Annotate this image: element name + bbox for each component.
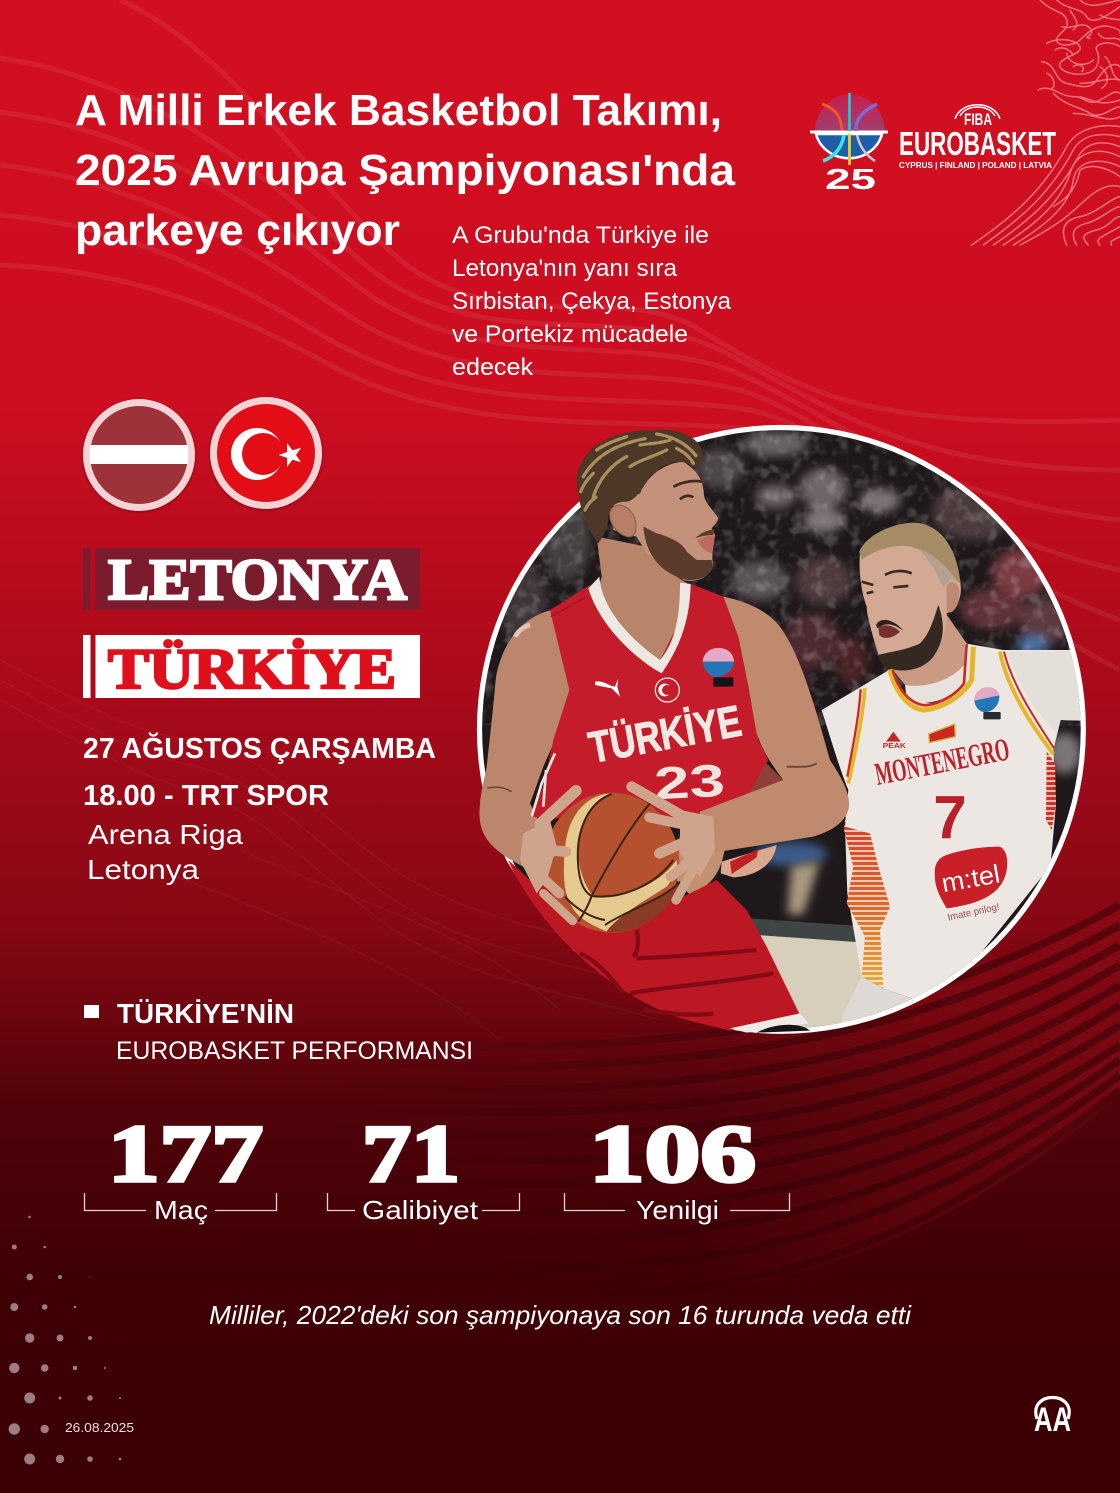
player: Türkiye number 23	[479, 430, 849, 1033]
far forearm	[721, 845, 777, 877]
sponsor tagline: Imate prilog!	[947, 902, 1000, 924]
brow and eye	[673, 481, 702, 499]
stat: matches played: 177	[108, 1108, 263, 1199]
side fade	[920, 550, 958, 586]
match details: 27 AĞUSTOS ÇARŞAMBA	[83, 731, 436, 765]
stat: wins: 71	[362, 1108, 460, 1199]
head	[860, 546, 961, 670]
photo: two basketball players in circular frame	[470, 420, 1100, 1050]
collar and trim	[890, 647, 973, 710]
shoulder seam	[551, 597, 587, 617]
EuroBasket jersey badge	[974, 687, 1001, 719]
shorts folds	[580, 930, 773, 1015]
title: 2025 Avrupa Şampiyonası'nda	[75, 146, 736, 195]
intro text block: A Grubu'nda Türkiye ile	[452, 222, 709, 249]
stat: matches played: Maç	[154, 1195, 208, 1225]
white jersey	[822, 643, 1084, 1000]
match details: Letonya	[87, 854, 199, 885]
beard	[643, 527, 713, 580]
elbow crease	[487, 787, 512, 792]
front arm	[697, 597, 849, 853]
intro text block: Letonya'nın yanı sıra	[452, 255, 678, 282]
arm muscle crease	[787, 763, 817, 767]
red jersey	[530, 583, 768, 820]
icon: Turkey flag	[210, 397, 322, 509]
section heading	[116, 998, 473, 1065]
far forearm wristband	[730, 849, 758, 874]
banner: Letonya: LETONYA	[108, 547, 407, 612]
EuroBasket jersey badge	[703, 648, 734, 687]
back arm	[479, 610, 573, 868]
belly skin	[677, 833, 725, 895]
stat: wins	[328, 1108, 520, 1225]
jersey text MONTENEGRO: MONTENEGRO	[872, 731, 1012, 792]
icon: EuroBasket globe trophy	[810, 93, 888, 196]
PEAK logo: PEAK	[883, 741, 907, 750]
stat: losses: Yenilgi	[636, 1195, 719, 1225]
left hand	[520, 791, 576, 921]
match details: 18.00 - TRT SPOR	[83, 780, 329, 812]
shoulder highlight	[515, 625, 530, 637]
hair	[859, 523, 961, 583]
icon: Anadolu Agency logo: AA	[1034, 1401, 1071, 1439]
mustache	[876, 620, 903, 631]
neck and chest	[597, 537, 687, 661]
jersey number 23: 23	[653, 755, 726, 809]
jersey side trim	[532, 753, 555, 817]
puma logo	[595, 678, 620, 697]
shoe	[757, 1025, 810, 1033]
intro text block: ve Portekiz mücadele	[452, 321, 688, 348]
mouth	[697, 536, 715, 553]
jersey text TÜRKİYE: TÜRKİYE	[585, 697, 745, 773]
jersey collar	[588, 577, 691, 673]
date stamp: 26.08.2025	[65, 1420, 134, 1435]
sponsor name: m:tel	[939, 859, 1002, 898]
jersey number 7: 7	[933, 783, 967, 852]
shorts	[840, 977, 912, 1023]
basketball	[544, 793, 682, 933]
neck	[892, 614, 967, 686]
stat: losses	[564, 1108, 790, 1225]
bullet square	[84, 1005, 99, 1018]
section heading: EUROBASKET PERFORMANSI	[116, 1037, 473, 1065]
head	[613, 462, 718, 581]
stat: wins: Galibiyet	[362, 1195, 479, 1225]
FIBA wordmark	[955, 105, 1000, 129]
sponsor badge	[935, 847, 1007, 908]
mouth	[878, 625, 900, 638]
player: Montenegro number 7	[822, 523, 1084, 1025]
mustache	[695, 529, 714, 538]
decorative dot grid	[9, 1216, 121, 1464]
footnote: Milliler, 2022'deki son şampiyonaya son 16 turunda veda etti	[209, 1300, 912, 1330]
crescent badge	[655, 678, 679, 702]
beard	[878, 605, 943, 671]
PEAK logo	[883, 732, 906, 748]
ear	[947, 582, 959, 613]
intro text block: Sırbistan, Çekya, Estonya	[452, 288, 732, 315]
icon: EuroBasket globe trophy: 25	[825, 164, 876, 196]
side pattern	[844, 752, 1056, 988]
section heading: TÜRKİYE'NİN	[117, 998, 294, 1029]
title: parkeye çıkıyor	[75, 206, 400, 255]
intro text block: edecek	[452, 354, 534, 381]
stat: losses: 106	[589, 1108, 756, 1199]
shorts hem	[730, 1013, 808, 1033]
icon: Latvia flag	[83, 399, 195, 511]
decorative maze pattern top right	[972, 0, 1120, 245]
logo: FIBA EuroBasket 2025	[810, 93, 1056, 196]
ear	[610, 505, 636, 537]
Montenegro flag patch	[929, 724, 955, 743]
undershirt	[905, 665, 964, 703]
banner: Türkiye: TÜRKİYE	[108, 638, 396, 701]
stat: matches played	[84, 1108, 276, 1225]
brows and eyes	[862, 571, 912, 593]
sleeve shade	[1007, 651, 1084, 733]
match details: Arena Riga	[88, 819, 243, 850]
right hand	[632, 787, 715, 900]
match details	[83, 731, 436, 885]
title	[75, 86, 736, 255]
photo background: crowd and floor	[470, 420, 1100, 1050]
host countries: CYPRUS | FINLAND | POLAND | LATVIA	[899, 161, 1052, 170]
FIBA wordmark: FIBA	[964, 110, 992, 129]
red shorts	[508, 860, 800, 1031]
intro text block	[452, 222, 732, 381]
hair	[577, 430, 702, 543]
far hand behind jersey	[737, 763, 785, 805]
title: A Milli Erkek Basketbol Takımı,	[75, 86, 722, 135]
